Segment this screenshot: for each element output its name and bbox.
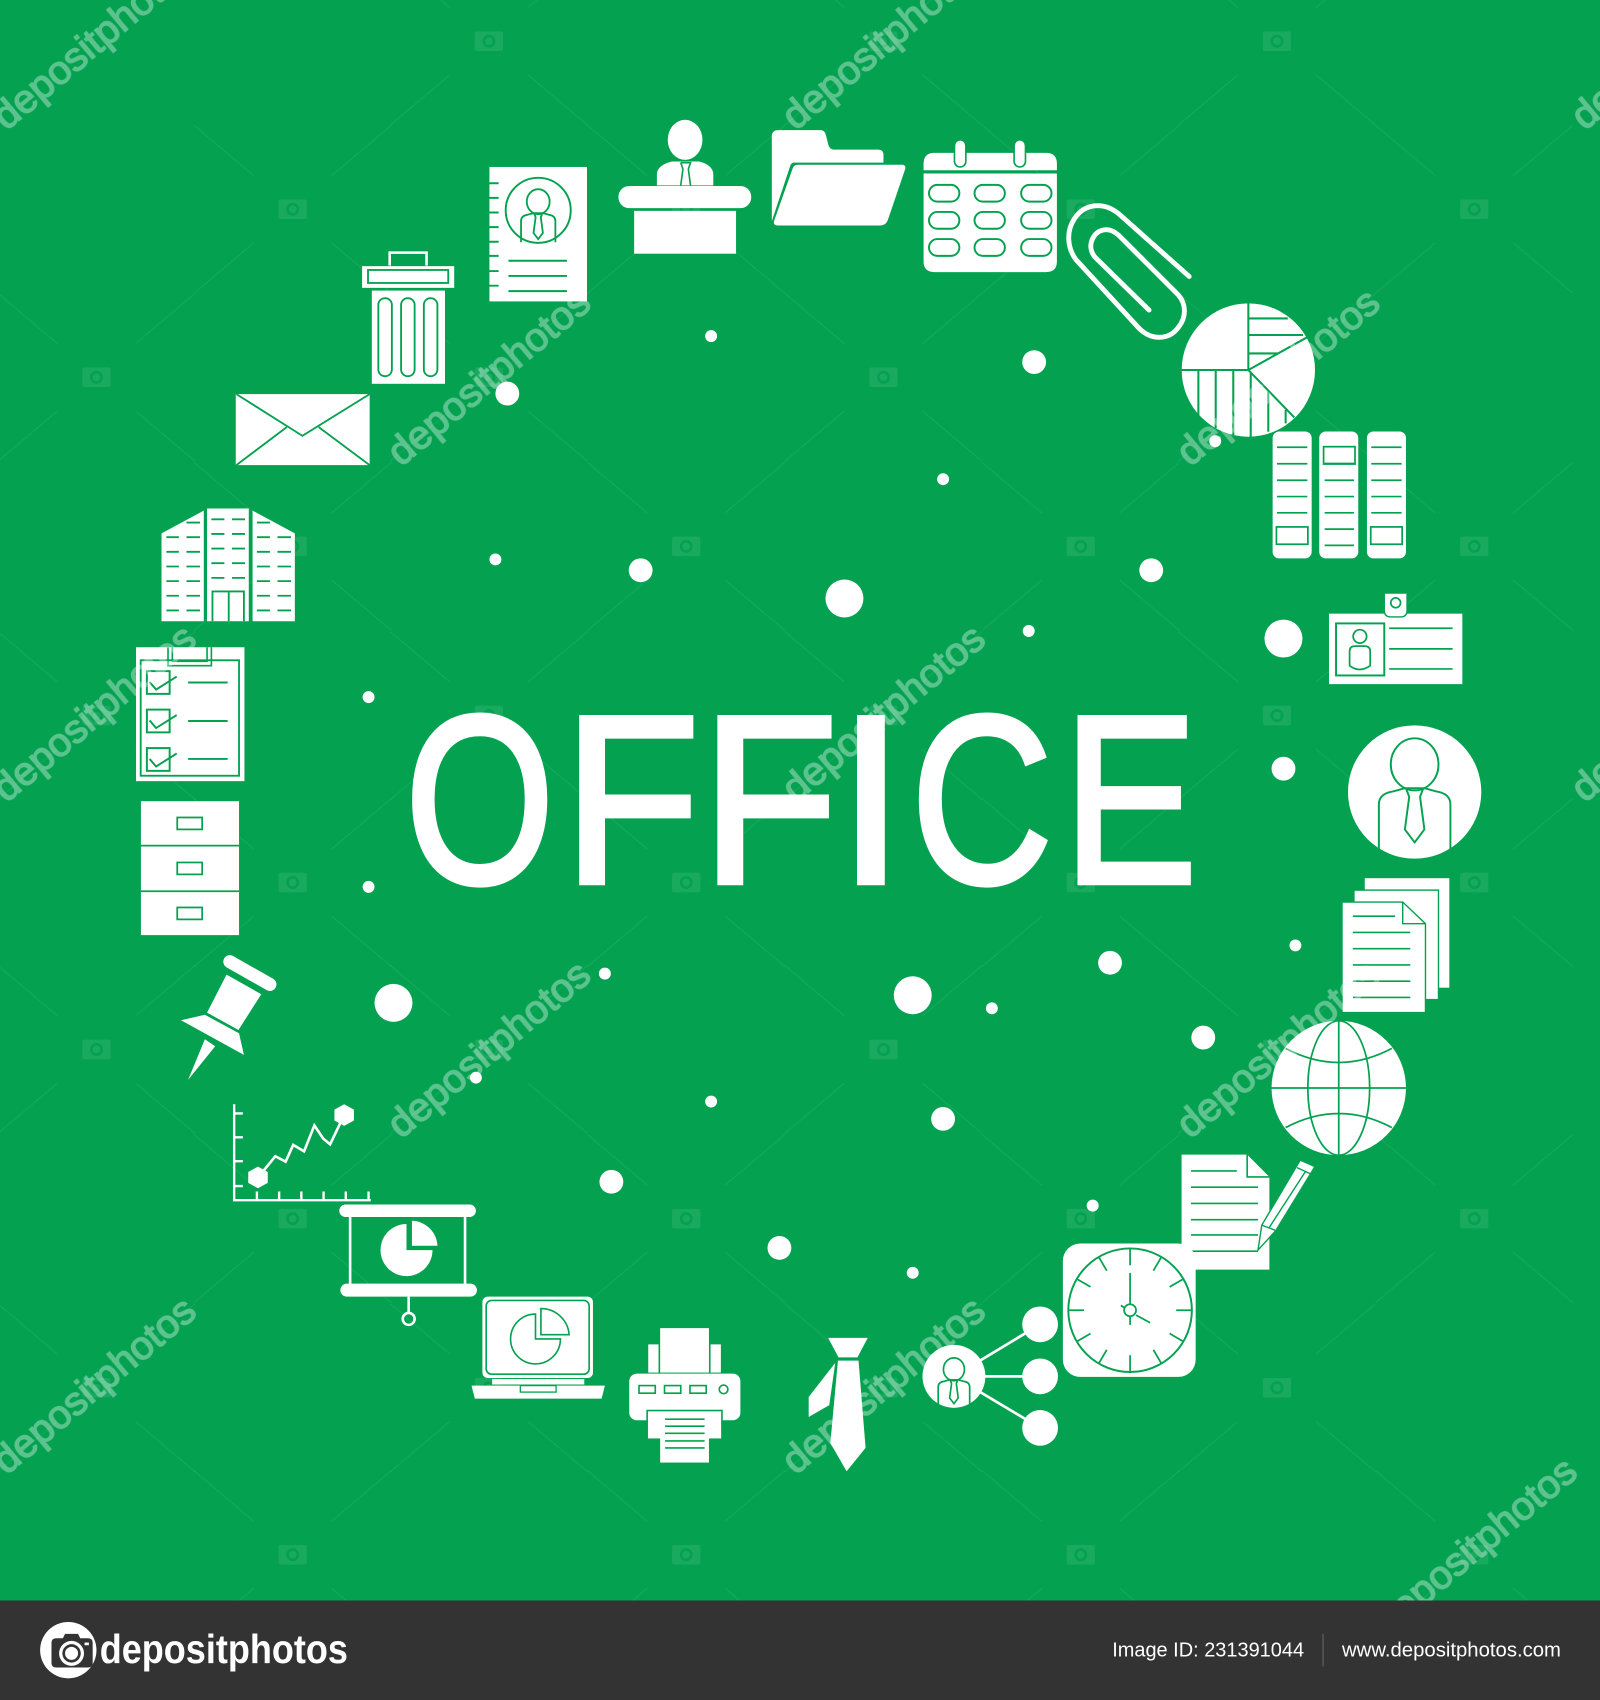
- scattered dots: [363, 330, 1302, 1279]
- title: O: [405, 666, 554, 933]
- icon: document stack: [1342, 878, 1449, 1013]
- icon: trash can: [362, 253, 454, 384]
- icon: network of people: [922, 1306, 1058, 1446]
- footer logo icon: [40, 1622, 96, 1678]
- icon: office building: [162, 508, 295, 621]
- footer divider: [1322, 1634, 1324, 1666]
- icon: checklist clipboard: [136, 647, 244, 781]
- icon: calendar: [924, 140, 1057, 272]
- icon: speaker at podium: [618, 120, 751, 254]
- icon: resume: [489, 167, 587, 301]
- title: C: [911, 667, 1052, 934]
- icon: paperclip: [1069, 206, 1189, 337]
- watermark text: depositphotos: [774, 1289, 993, 1482]
- footer logo text: depositphotos: [100, 1626, 348, 1672]
- icon: printer: [629, 1328, 740, 1463]
- title: F: [702, 666, 838, 934]
- icon: pushpin: [181, 962, 270, 1080]
- image id: Image ID: 231391044: [1112, 1640, 1304, 1662]
- watermark text: depositphotos: [379, 280, 599, 474]
- title: I: [838, 666, 904, 934]
- icon: line chart: [234, 1104, 371, 1200]
- icon: binders: [1273, 432, 1406, 558]
- icon: folder: [772, 130, 905, 226]
- website url: www.depositphotos.com: [1341, 1640, 1561, 1662]
- icon: necktie: [809, 1338, 868, 1471]
- watermark text: depositphotos: [774, 616, 993, 810]
- watermark text: depositphotos: [379, 952, 599, 1146]
- icon: id badge: [1329, 593, 1462, 684]
- icon: clock: [1063, 1244, 1196, 1377]
- icon: document and pencil: [1182, 1155, 1315, 1270]
- icon: pie chart: [1180, 302, 1315, 437]
- watermark text: depositphotos: [1168, 952, 1388, 1146]
- icon: globe: [1272, 1020, 1406, 1156]
- watermark text: depositphotos: [1168, 280, 1388, 474]
- footer bar: [0, 1600, 1600, 1700]
- icon: projector screen: [339, 1205, 477, 1325]
- watermark text: depositphotos: [1366, 1449, 1585, 1643]
- icon: person in circle: [1348, 725, 1481, 859]
- title: [405, 666, 1197, 934]
- title: F: [563, 666, 700, 934]
- icon: filing cabinet: [141, 801, 239, 935]
- icon: laptop with pie chart: [472, 1297, 605, 1399]
- title: E: [1063, 666, 1197, 933]
- icon: envelope: [236, 394, 370, 465]
